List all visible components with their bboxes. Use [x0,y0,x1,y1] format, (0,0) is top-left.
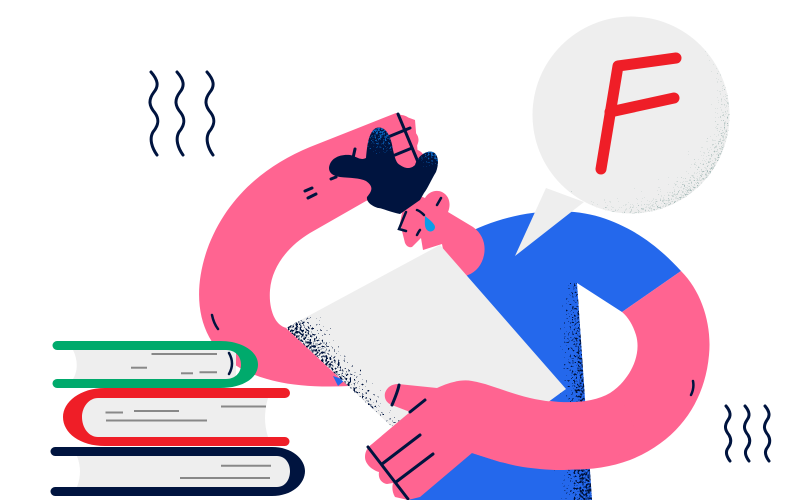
bubble speckle [571,52,730,214]
right arm [465,271,710,470]
speech bubble [515,14,732,256]
ink splat [329,127,438,214]
blue sliver under paper [333,376,345,386]
torso speckle [554,283,592,500]
book: navy [50,447,305,496]
wavy lines right [725,406,770,461]
splat speckle 2 [417,152,438,172]
text lines [180,466,271,478]
finger lines [305,114,418,198]
torso: blue shirt [333,211,681,500]
head [399,191,485,285]
spine mark [229,353,232,374]
text lines [131,354,217,373]
book: red [63,388,290,446]
left arm [199,113,420,387]
hand lines [368,385,433,499]
paper speckle [286,307,425,428]
grade F [601,58,676,169]
face features [399,198,441,235]
arm crease [691,381,693,395]
splat speckle [366,127,395,165]
wavy lines left [150,72,214,155]
hand [365,380,640,500]
tear [425,216,435,231]
elbow crease [212,315,218,329]
book: green [52,341,258,388]
fist fingers [305,114,425,198]
exam paper [286,245,566,428]
text lines [106,406,266,420]
